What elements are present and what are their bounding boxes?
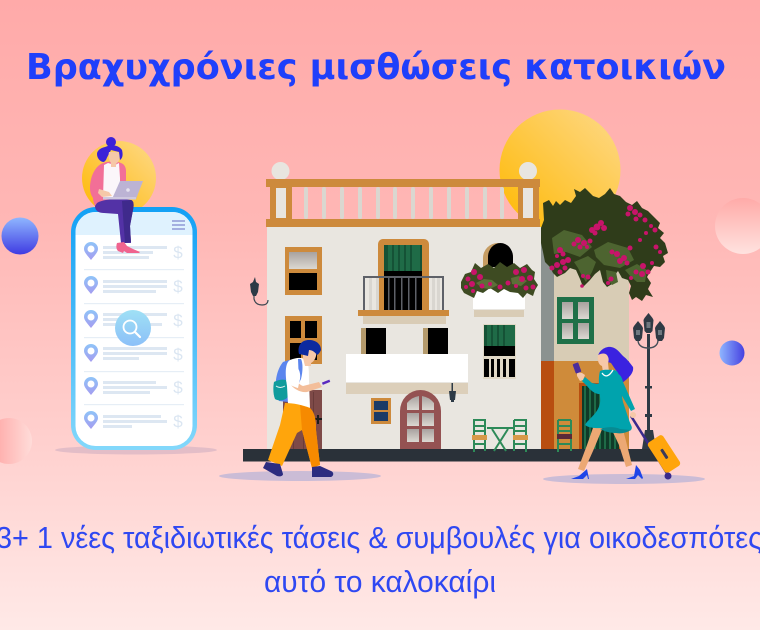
price symbols: $ [173,378,183,397]
woman shadow [543,474,705,484]
sleeve [286,365,300,388]
price symbols: $ [173,243,183,262]
phone shadow [55,446,217,454]
large sun behind building [500,110,620,230]
railing pillars [270,187,539,219]
back sleeve [616,373,635,411]
white band [346,354,468,394]
balcony slab [358,310,449,324]
skirt shade [600,427,631,433]
subtitle: αυτό το καλοκαίρι [264,564,496,599]
pin holes [88,246,94,422]
right shuttered window [483,324,516,379]
small blue window [371,398,391,424]
phone [322,380,330,385]
legs [578,425,632,471]
man walking with phone [263,340,333,477]
window top left [285,247,322,295]
hand [98,189,112,197]
laptop logo [126,188,130,192]
decorative circle: pink right [715,198,760,254]
laptop [112,181,143,199]
hair [598,347,633,384]
list dividers [84,269,184,405]
woman with suitcase [571,347,681,480]
legs [95,199,134,243]
right house [541,227,629,449]
hair [299,340,321,356]
head [303,348,317,366]
brown door [283,390,322,449]
orange trousers [268,403,320,468]
face [598,354,609,372]
white top [103,163,120,198]
hand [577,372,585,381]
street lamp [633,313,665,449]
balcony railing [363,276,444,310]
title: Βραχυχρόνιες μισθώσεις κατοικιών [26,47,726,88]
chair middle [513,420,528,452]
wall lantern small [449,383,456,402]
railing bars [266,179,540,227]
backpack strap [298,359,302,383]
laptop base [103,197,136,200]
shoes [116,242,140,253]
green window [557,297,594,344]
window mid left [285,316,322,364]
front sleeve [582,377,603,394]
building [266,162,541,449]
price symbols [173,243,183,431]
left heel [571,469,589,479]
lighter leaves [552,230,647,285]
balusters [304,187,504,219]
cafe chairs and table [472,420,572,452]
arched window with flowers [461,243,538,317]
hair [97,145,123,162]
ground bar [243,449,660,462]
pink flowers [550,205,662,288]
magnifier icon [115,310,151,346]
price symbols: $ [173,412,183,431]
rooftop globes [272,162,537,180]
woman with laptop sitting on phone [90,137,143,253]
backpack [273,360,300,402]
price symbols: $ [173,311,183,330]
yellow sun behind woman [82,141,156,215]
woman phone [572,362,582,374]
jacket [90,162,126,208]
shoes [263,462,283,476]
chair right [557,420,572,452]
decorative circle: blue right [720,340,744,366]
trailing hand [630,412,636,418]
wall lantern left [250,277,268,305]
price symbols: $ [173,277,183,296]
green door [579,383,622,449]
main wall [267,227,541,449]
table [487,428,513,451]
location pins [84,242,98,429]
bougainvillea foliage [541,188,668,301]
arched door [400,390,441,449]
menu icon [172,220,185,230]
necklace [602,370,613,376]
listing rows text lines [103,246,167,428]
arm [291,379,322,392]
chair left [472,420,487,452]
mid black windows [361,328,448,354]
face [109,152,120,167]
bun [106,137,116,147]
suitcase [631,416,681,480]
shirt [286,358,310,408]
man shadow [219,471,381,481]
decorative circle: blue left [2,218,38,254]
right heel [626,465,643,479]
dress [585,370,632,431]
decorative circle: pink bottom left [0,418,32,464]
centre balcony window [378,239,429,310]
price symbols: $ [173,345,183,364]
phone mockup [71,207,197,450]
